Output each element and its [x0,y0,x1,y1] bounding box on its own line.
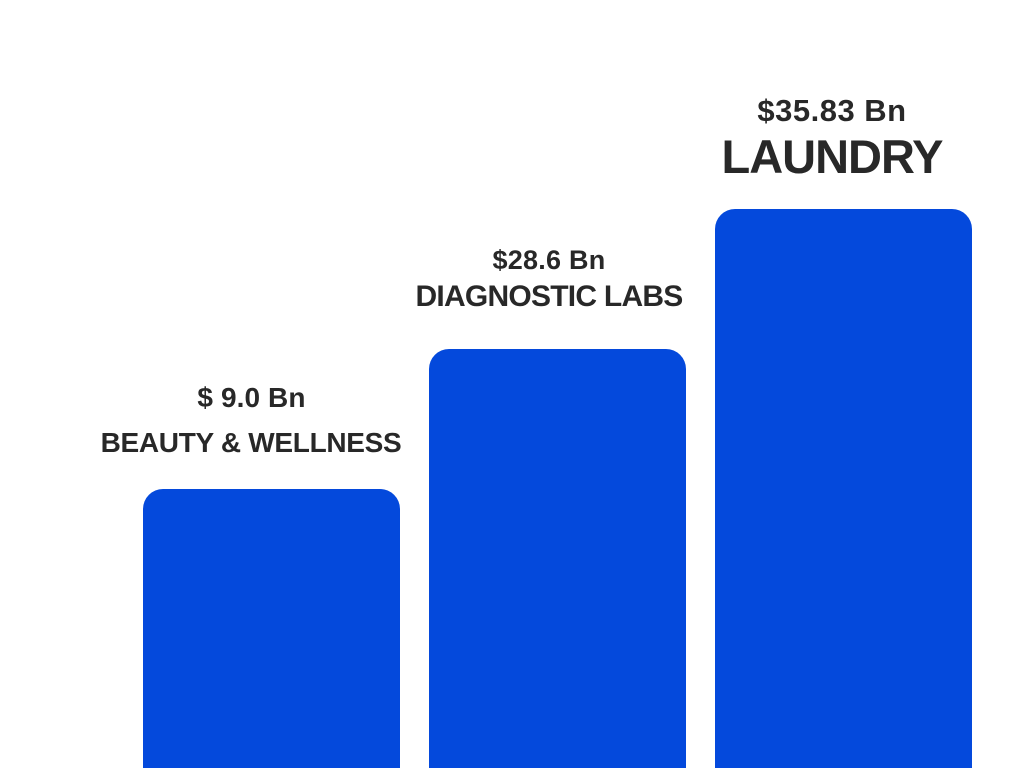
label: diagnostic labs: DIAGNOSTIC LABS [415,280,683,313]
value: laundry: $35.83 Bn [757,93,907,128]
bar: laundry [715,209,972,768]
label: laundry: LAUNDRY [721,130,943,183]
label: beauty & wellness: BEAUTY & WELLNESS [101,427,401,458]
bar: beauty & wellness [143,489,400,768]
value: beauty & wellness: $ 9.0 Bn [197,382,306,413]
bar: diagnostic labs [429,349,686,768]
value: diagnostic labs: $28.6 Bn [492,245,606,275]
